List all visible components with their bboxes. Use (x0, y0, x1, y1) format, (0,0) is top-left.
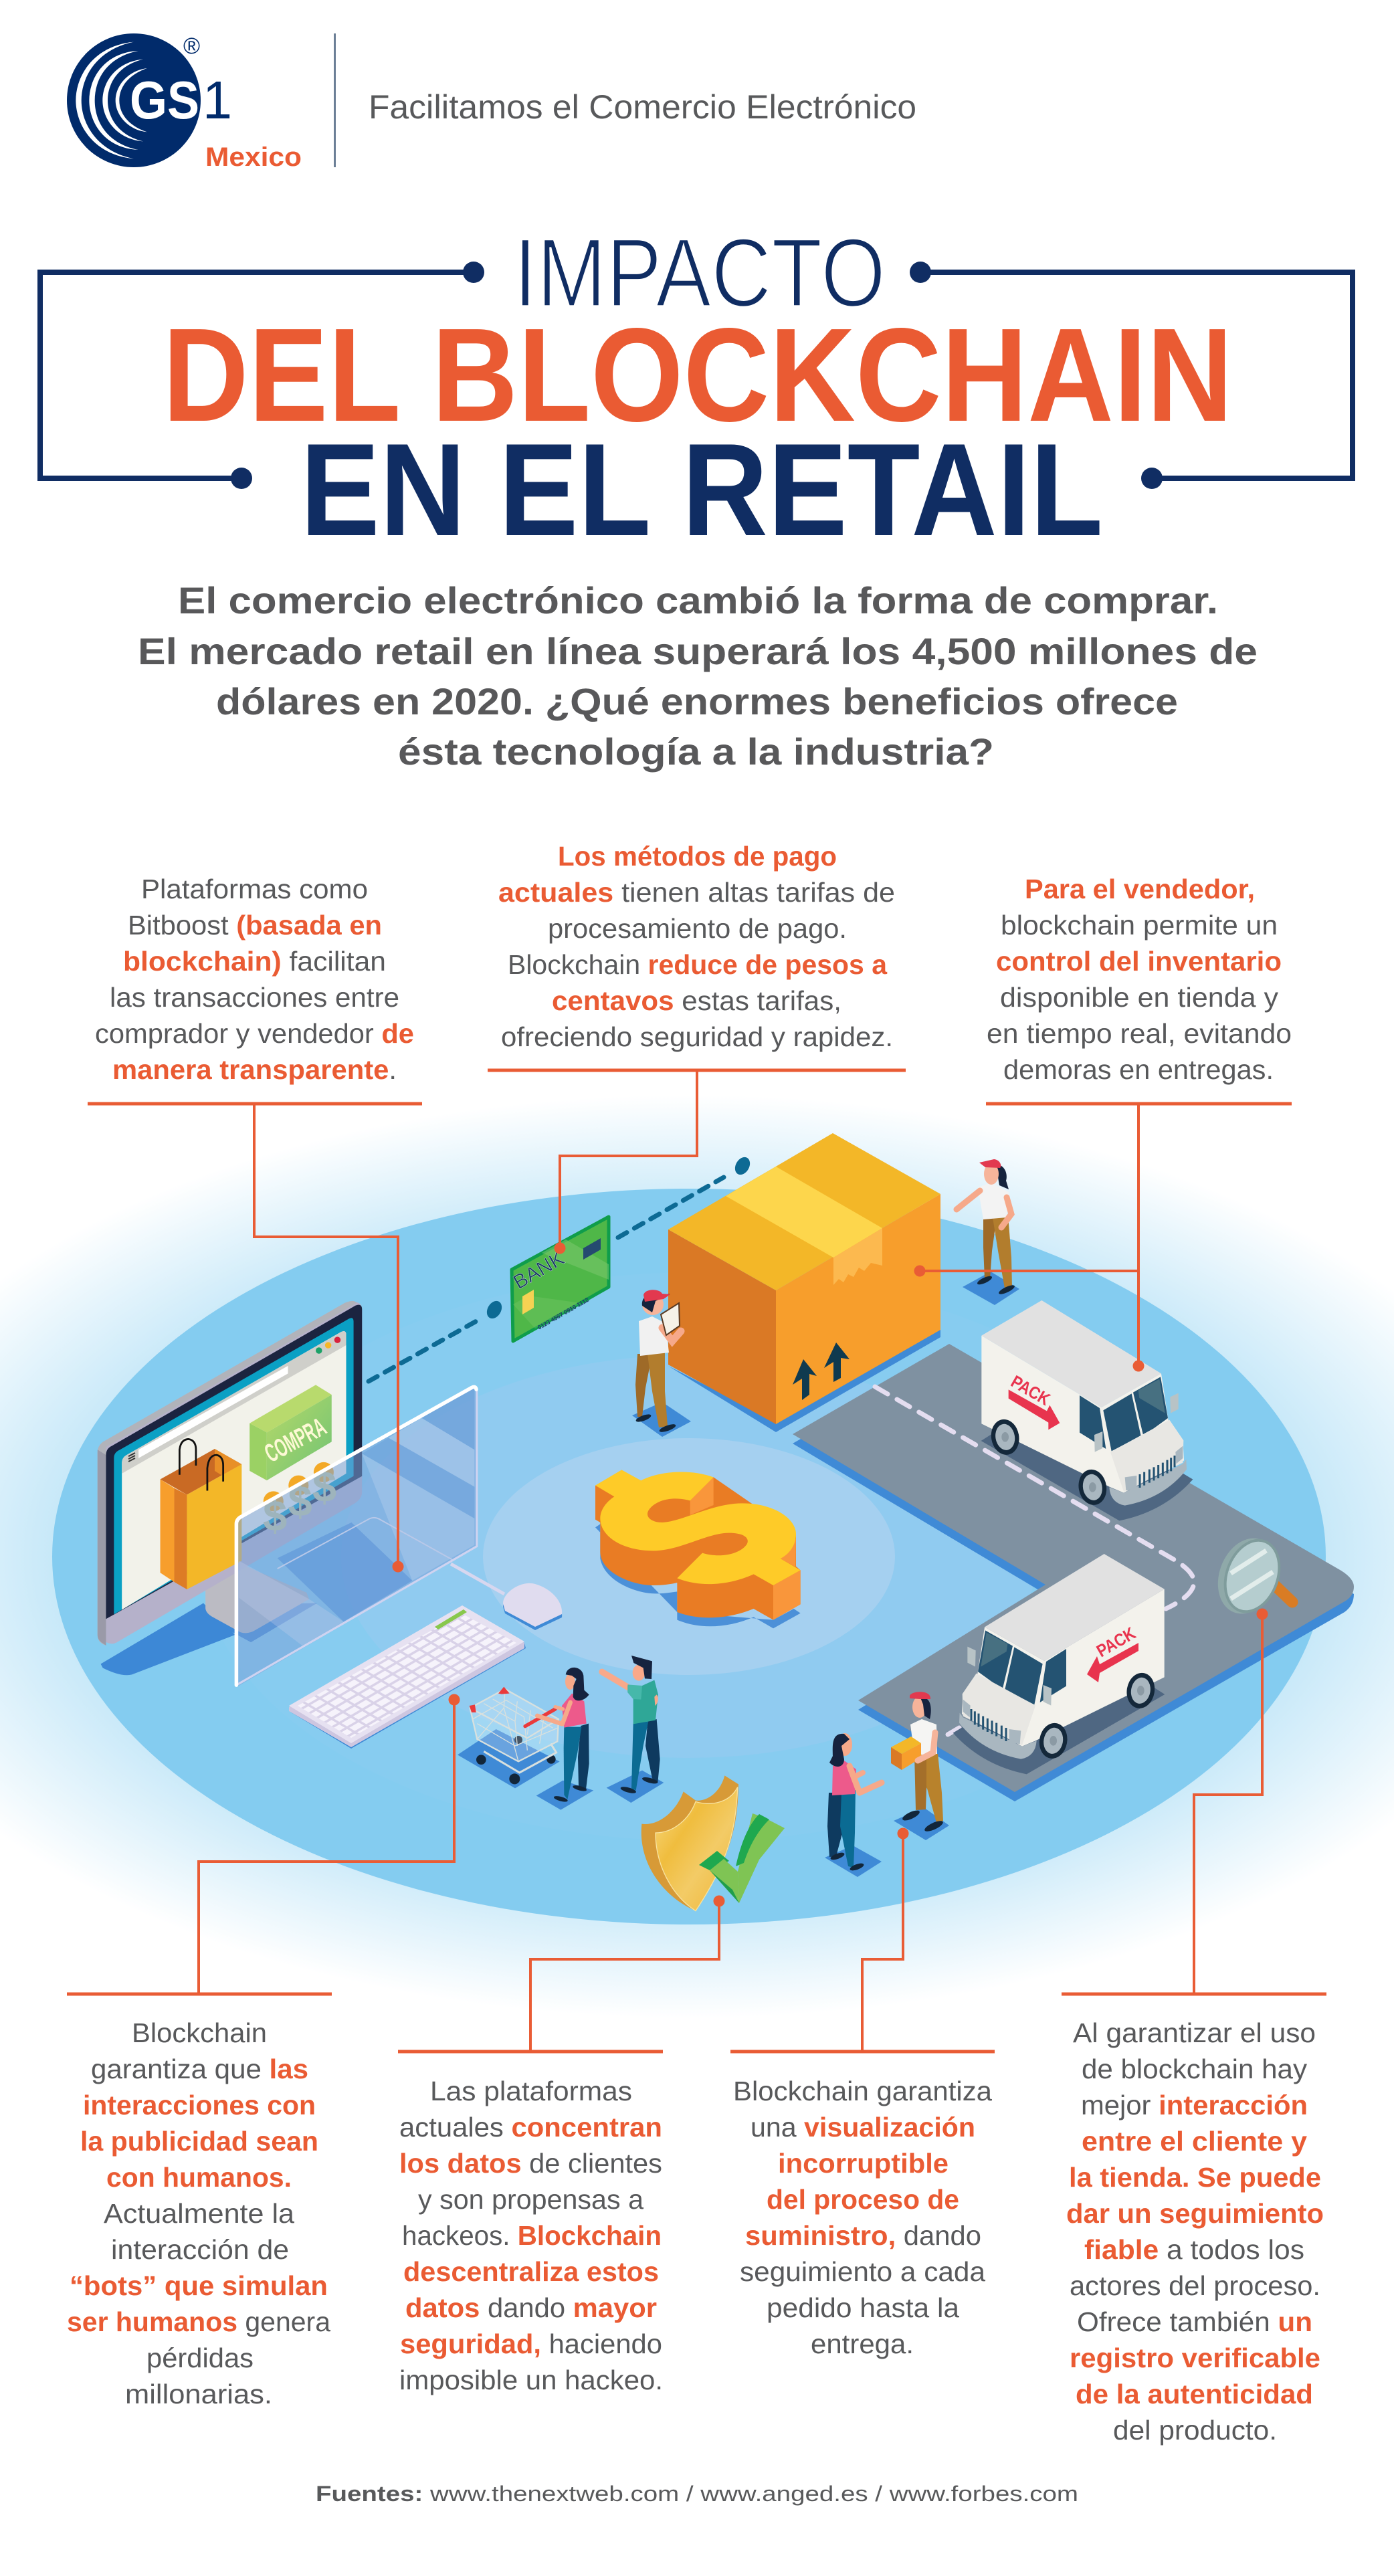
icon: small dollar signs: $ (263, 1491, 287, 1540)
icon: shield (641, 1775, 738, 1911)
illustration (52, 1133, 1354, 1924)
icon: magnifying glass (1208, 1530, 1292, 1622)
van label: PACK (1007, 1371, 1054, 1409)
callout text: Blockchain reduce de pesos a (508, 949, 888, 980)
icon: cardboard box (668, 1133, 940, 1432)
callout text: seguridad, haciendo (400, 2329, 662, 2359)
platform ellipse (52, 1189, 1326, 1924)
callout text: con humanos. (106, 2162, 292, 2193)
callout text: Plataformas como (141, 874, 368, 904)
callout text: Ofrece también un (1077, 2306, 1312, 2337)
callout text: manera transparente. (112, 1054, 397, 1085)
figure: man pointing (602, 1656, 664, 1803)
icon: small dollar signs: $ (288, 1476, 312, 1525)
header: logo (67, 33, 302, 172)
callout text: pedido hasta la (767, 2292, 959, 2323)
icon: credit card (510, 1217, 609, 1341)
callout connector (398, 1896, 725, 2052)
callout text (67, 2017, 330, 2409)
callout connector (67, 1694, 460, 1994)
figure: courier with parcel (891, 1692, 949, 1840)
figure: woman pointing (957, 1159, 1019, 1305)
callout text: actores del proceso. (1070, 2270, 1320, 2301)
callout text: Al garantizar el uso (1073, 2017, 1316, 2048)
callout text: Los métodos de pago (558, 841, 837, 872)
callout text (498, 841, 895, 1052)
callout text: imposible un hackeo. (399, 2365, 663, 2395)
callout connector (914, 1104, 1292, 1371)
callout: transparent platforms (88, 874, 422, 1572)
callout connector (730, 1827, 995, 2052)
callout text: hackeos. Blockchain (402, 2220, 662, 2251)
card label: BANK (510, 1248, 568, 1294)
callout text: descentraliza estos (403, 2256, 659, 2287)
callout text: de blockchain hay (1082, 2054, 1307, 2084)
icon: shopping cart (458, 1687, 560, 1788)
callout: data security (398, 1896, 725, 2395)
icon: dollar sign (595, 1470, 801, 1628)
callout text: comprador y vendedor de (95, 1018, 414, 1049)
callout text (95, 874, 414, 1085)
callout text: pérdidas (146, 2343, 254, 2373)
title (163, 218, 1233, 563)
callout text: suministro, dando (745, 2220, 981, 2251)
intro paragraph (138, 579, 1258, 773)
callout text: datos dando mayor (405, 2292, 657, 2323)
callout text: blockchain permite un (1001, 910, 1278, 940)
callout text: Para el vendedor, (1025, 874, 1255, 904)
callout connector (88, 1104, 422, 1572)
callout text: las transacciones entre (110, 982, 399, 1013)
icon: keyboard (289, 1605, 526, 1749)
road (793, 1344, 1354, 1801)
logo wordmark 1: 1 (203, 70, 232, 130)
intro paragraph: dólares en 2020. ¿Qué enormes beneficios ofrece (216, 680, 1178, 722)
callout text: del producto. (1113, 2415, 1277, 2446)
callout connector (1062, 1608, 1326, 1994)
callout text: blockchain) facilitan (123, 946, 386, 977)
callout text: millonarias. (125, 2379, 272, 2409)
callout text: de la autenticidad (1076, 2379, 1313, 2409)
callout: traceability (1062, 1608, 1326, 2446)
callout text: Las plataformas (430, 2076, 632, 2106)
callout text: demoras en entregas. (1003, 1054, 1274, 1085)
title bracket (40, 262, 1353, 489)
icon: compra button (250, 1385, 332, 1480)
callout text (733, 2076, 992, 2359)
icon: mouse (451, 1564, 562, 1630)
icon: desktop monitor (98, 1301, 478, 1686)
callout text: garantiza que las (91, 2054, 308, 2084)
icon: van arrow (1087, 1643, 1138, 1682)
registered mark: ® (183, 33, 200, 59)
icon: GS1 globe (67, 33, 201, 167)
title line 2: DEL BLOCKCHAIN (163, 301, 1233, 450)
callout text: registro verificable (1070, 2343, 1320, 2373)
callout text: del proceso de (767, 2184, 959, 2215)
callout text: procesamiento de pago. (548, 913, 847, 944)
callout text: la publicidad sean (80, 2126, 318, 2157)
callout text: ser humanos genera (67, 2306, 330, 2337)
callout text (1066, 2017, 1324, 2446)
intro paragraph: El mercado retail en línea superará los 4,500 millones de (138, 630, 1258, 672)
icon: glass screen (235, 1386, 478, 1686)
figure: woman receiving parcel (825, 1733, 882, 1877)
callout text (987, 874, 1292, 1085)
icon: delivery van 1 (981, 1300, 1193, 1520)
background halo (0, 1095, 1394, 2018)
figure: man with clipboard (632, 1290, 691, 1437)
callout text: en tiempo real, evitando (987, 1018, 1292, 1049)
callout text: seguimiento a cada (740, 2256, 985, 2287)
icon: delivery van 2 (953, 1554, 1165, 1774)
callout text: y son propensas a (418, 2184, 643, 2215)
callout text: entrega. (811, 2329, 914, 2359)
logo country: Mexico (205, 142, 302, 172)
callout: seller inventory (914, 874, 1292, 1371)
icon: small dollar signs (263, 1462, 336, 1540)
callout text: ofreciendo seguridad y rapidez. (501, 1021, 893, 1052)
logo wordmark GS: GS (130, 70, 199, 130)
icon: check mark (699, 1813, 785, 1903)
callout text: control del inventario (996, 946, 1282, 977)
icon: small dollar signs: $ (312, 1462, 336, 1510)
icon: this way up arrows (793, 1343, 850, 1400)
callout text: incorruptible (778, 2148, 949, 2179)
callout: payment methods (488, 841, 906, 1254)
callout text: interacción de (111, 2234, 289, 2265)
callout: supply process (730, 1827, 995, 2359)
title line 3: EN EL RETAIL (300, 416, 1103, 563)
icon: shopping bag (161, 1439, 241, 1589)
callout connector (488, 1070, 906, 1254)
callout text: Blockchain garantiza (733, 2076, 992, 2106)
figure: woman with cart and man pointing (458, 1656, 664, 1810)
button label: COMPRA (260, 1413, 331, 1468)
card number: 0123 4567 0910 1112 (536, 1296, 590, 1331)
intro paragraph: ésta tecnología a la industria? (398, 730, 994, 773)
callout text: centavos estas tarifas, (552, 985, 841, 1016)
callout text: fiable a todos los (1084, 2234, 1304, 2265)
callout text: “bots” que simulan (70, 2270, 328, 2301)
callout text: actuales tienen altas tarifas de (498, 877, 895, 908)
callout text: disponible en tienda y (1000, 982, 1279, 1013)
callout text: Blockchain (132, 2017, 267, 2048)
icon: van arrow (1009, 1389, 1060, 1429)
dotted path (369, 1155, 753, 1381)
callout text: Bitboost (basada en (128, 910, 382, 940)
figure: woman with cart (536, 1668, 593, 1810)
callout: advertising (67, 1694, 460, 2409)
intro paragraph: El comercio electrónico cambió la forma de comprar. (178, 579, 1218, 621)
callout text: mejor interacción (1081, 2090, 1308, 2120)
header divider (334, 33, 336, 167)
callout text: interacciones con (83, 2090, 316, 2120)
sources footer: Fuentes: www.thenextweb.com / www.anged.es / www.forbes.com (316, 2482, 1078, 2506)
callout text: entre el cliente y (1082, 2126, 1307, 2157)
callout text: los datos de clientes (399, 2148, 662, 2179)
callout text: Actualmente la (104, 2198, 294, 2229)
callout text: actuales concentran (399, 2112, 662, 2143)
icon: parcel (891, 1737, 921, 1770)
callout text: la tienda. Se puede (1069, 2162, 1321, 2193)
callout text: dar un seguimiento (1066, 2198, 1324, 2229)
tagline: Facilitamos el Comercio Electrónico (369, 88, 916, 126)
callout text (399, 2076, 663, 2395)
title line 1: IMPACTO (514, 218, 886, 327)
callout text: una visualización (751, 2112, 975, 2143)
van label: PACK (1093, 1623, 1139, 1661)
